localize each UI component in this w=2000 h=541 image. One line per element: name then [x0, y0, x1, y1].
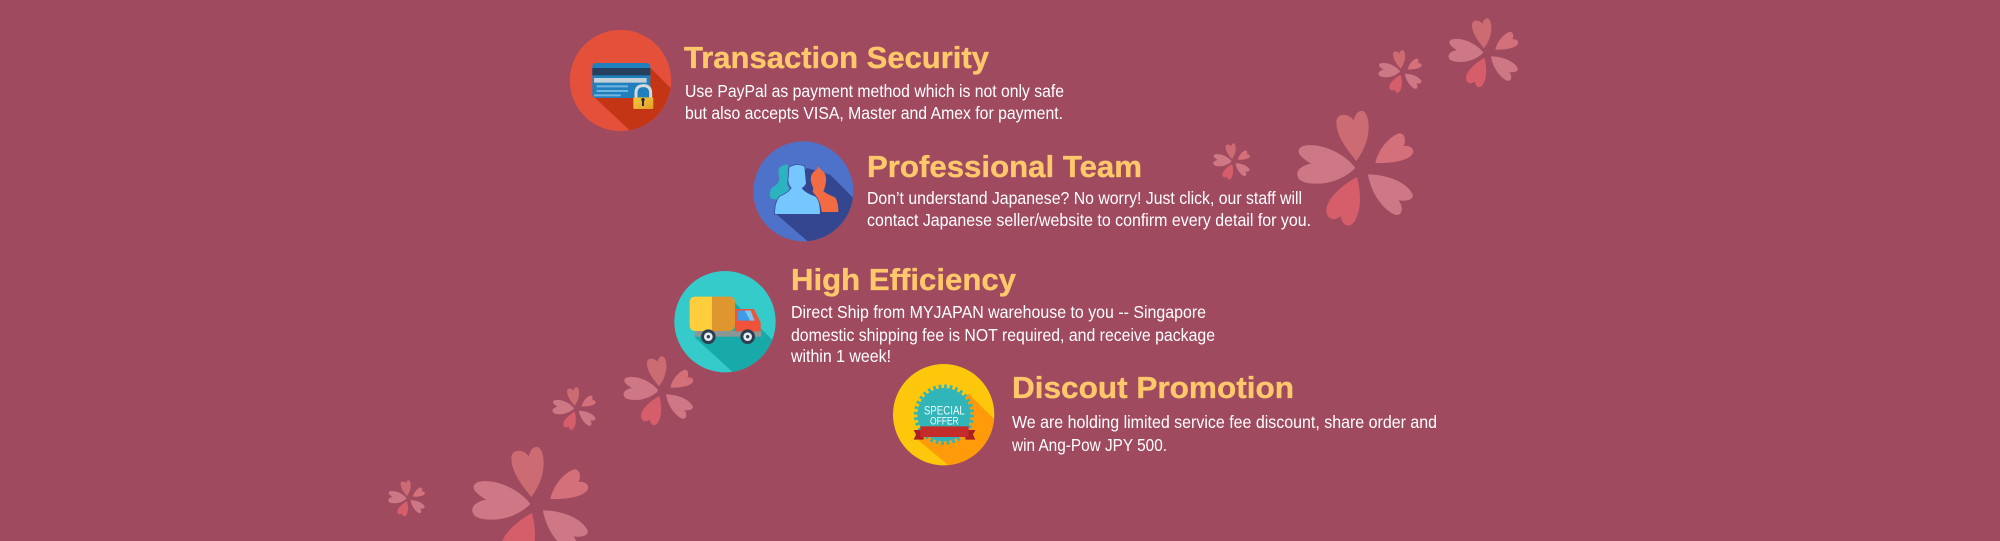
text block — [790, 302, 1215, 366]
icon: credit card with padlock — [570, 30, 672, 132]
heading: Transaction Security — [684, 40, 990, 75]
text block: contact Japanese seller/website to confirm every detail for you. — [867, 210, 1311, 230]
panel: Transaction Security — [570, 30, 1064, 132]
flower: bottom left medium — [624, 356, 693, 425]
panel: Discout Promotion — [893, 364, 1436, 466]
icon: special offer badge: SPECIAL — [924, 403, 965, 417]
icon: delivery truck — [674, 271, 776, 372]
flower: bottom left tiny — [388, 480, 425, 516]
flower: top right medium — [1449, 18, 1518, 87]
text block: Direct Ship from MYJAPAN warehouse to you -- Singapore — [791, 302, 1206, 322]
flower: top right tiny — [1213, 143, 1250, 179]
icon: special offer badge — [893, 364, 994, 466]
text block — [685, 81, 1064, 123]
text block: within 1 week! — [790, 346, 891, 366]
text block: but also accepts VISA, Master and Amex for payment. — [685, 103, 1063, 123]
text block: win Ang-Pow JPY 500. — [1011, 435, 1167, 455]
icon: special offer badge: OFFER — [930, 416, 959, 428]
text block: We are holding limited service fee discount, share order and — [1012, 412, 1437, 432]
icon: team silhouettes — [753, 141, 854, 242]
heading: High Efficiency — [791, 262, 1017, 297]
flower: bottom left small — [553, 387, 596, 430]
text block — [867, 188, 1311, 230]
text block: domestic shipping fee is NOT required, and receive package — [791, 325, 1215, 345]
text block: Don’t understand Japanese? No worry! Just click, our staff will — [867, 188, 1302, 208]
text block: Use PayPal as payment method which is not only safe — [685, 81, 1064, 101]
heading: Discout Promotion — [1012, 370, 1294, 405]
flower: top right small — [1379, 50, 1422, 93]
flower: bottom left large — [472, 447, 588, 541]
panel: Professional Team — [753, 141, 1310, 242]
text block — [1011, 412, 1437, 455]
panel: High Efficiency — [674, 268, 1214, 372]
heading: Professional Team — [867, 149, 1142, 184]
flower: top right large — [1297, 111, 1413, 226]
